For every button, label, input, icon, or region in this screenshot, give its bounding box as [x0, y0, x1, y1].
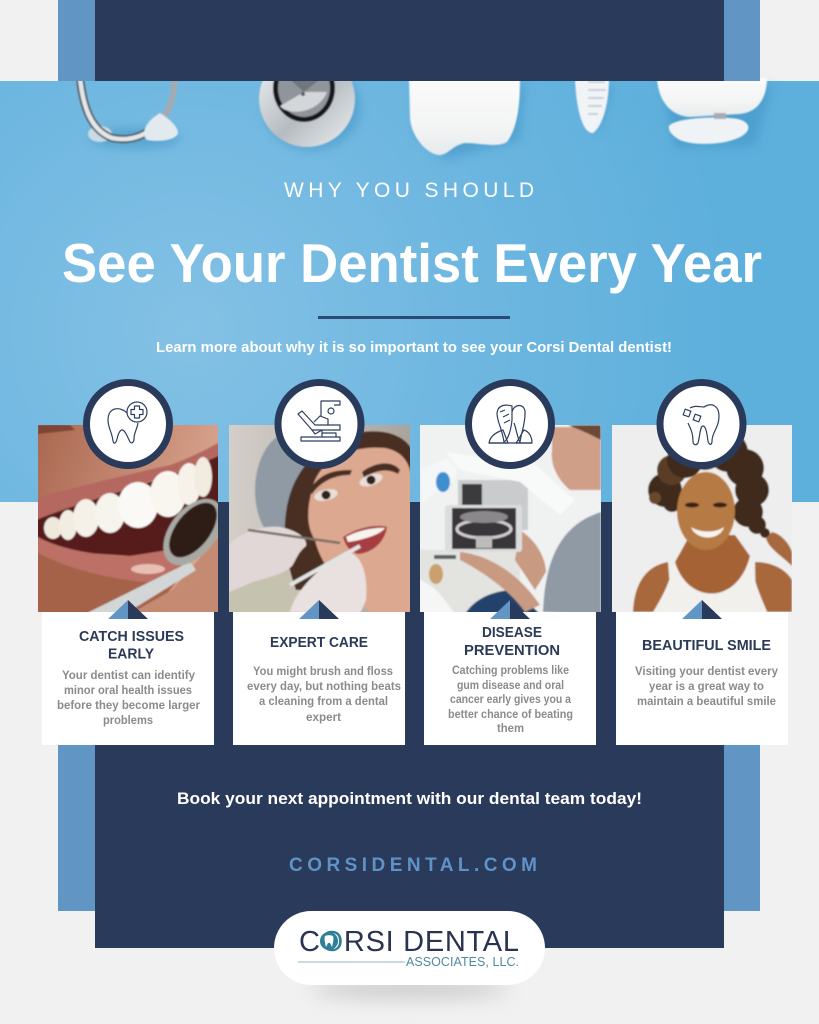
card heading: EXPERT CARE [270, 635, 368, 651]
card body text [635, 664, 778, 708]
teeth [44, 517, 62, 539]
card: disease prevention [424, 612, 596, 745]
top bar: navy block [95, 0, 724, 81]
bottom panel: navy block [95, 502, 724, 948]
icon: healthy and decayed tooth [468, 382, 552, 466]
card body text: Visiting your dentist every [635, 664, 778, 678]
icon: large tooth model [409, 78, 520, 155]
arms and chest [633, 562, 672, 612]
card body text: a cleaning from a dental [259, 694, 388, 708]
card body text: them [497, 721, 524, 735]
icon: stethoscope chest piece [259, 51, 355, 147]
card body text: cancer early gives you a [450, 692, 571, 706]
card body text: minor oral health issues [64, 683, 192, 697]
card body text: gum disease and oral [457, 678, 564, 692]
card heading: DISEASE [482, 625, 542, 641]
icon: dental floss box [657, 78, 767, 144]
bottom panel: light blue strip [58, 502, 760, 911]
card body text: maintain a beautiful smile [637, 694, 776, 708]
subtitle: Learn more about why it is so important to see your Corsi Dental dentist! [156, 340, 672, 356]
photo: smile with dental mirror [38, 425, 218, 612]
card body text: before they become larger [57, 698, 200, 712]
icon: stethoscope [80, 78, 178, 142]
photo: dentist showing x-ray on tablet [418, 423, 603, 614]
curly hair [648, 432, 770, 538]
top bar: light blue strip [58, 0, 760, 81]
photo: smiling woman with curly hair [610, 423, 794, 614]
card heading: PREVENTION [464, 643, 560, 659]
card: expert care [233, 612, 405, 745]
tablet with x-ray [445, 505, 522, 552]
icon: dental chair [278, 382, 361, 466]
logo tooth mark [320, 932, 338, 950]
card body text: Your dentist can identify [62, 668, 195, 682]
photo: dentist examining patient [227, 423, 412, 614]
card body text: problems [103, 713, 153, 727]
card body text [57, 668, 200, 727]
main title: See Your Dentist Every Year [62, 232, 762, 294]
card body text: every day, but nothing beats [247, 679, 401, 693]
pointer triangles [108, 600, 722, 619]
title divider [318, 316, 510, 319]
card body text: Catching problems like [452, 663, 569, 677]
card body text [448, 663, 573, 735]
card heading [464, 625, 560, 659]
card: catch issues early [42, 612, 214, 745]
object shadows [90, 66, 772, 160]
card body text: year is a great way to [649, 679, 764, 693]
logo badge [274, 911, 545, 985]
hero photo objects: dental tools [80, 51, 772, 160]
card heading [79, 629, 184, 662]
logo wordmark: CORSI DENTAL [299, 926, 519, 958]
website url: CORSIDENTAL.COM [289, 855, 537, 876]
logo tagline: ASSOCIATES, LLC. [406, 955, 519, 969]
icon: toothbrush head [575, 78, 609, 133]
card body text [247, 664, 401, 724]
card body text: expert [306, 710, 341, 724]
card body text: You might brush and floss [253, 664, 393, 678]
card body text: better chance of beating [448, 707, 573, 721]
gloved hands [229, 527, 306, 592]
card heading: CATCH ISSUES [79, 629, 184, 645]
card heading: BEAUTIFUL SMILE [642, 638, 771, 654]
card: beautiful smile [616, 612, 788, 745]
tank top [652, 580, 768, 612]
icon: tooth with braces [660, 382, 743, 466]
eyebrow heading: WHY YOU SHOULD [284, 179, 534, 202]
logo shadow [310, 978, 510, 998]
dental mirror [85, 562, 196, 614]
call to action: Book your next appointment with our dental team today! [177, 789, 642, 808]
icon: tooth with plus [86, 382, 170, 466]
card heading: EARLY [108, 646, 154, 662]
hero blue background [0, 81, 819, 502]
